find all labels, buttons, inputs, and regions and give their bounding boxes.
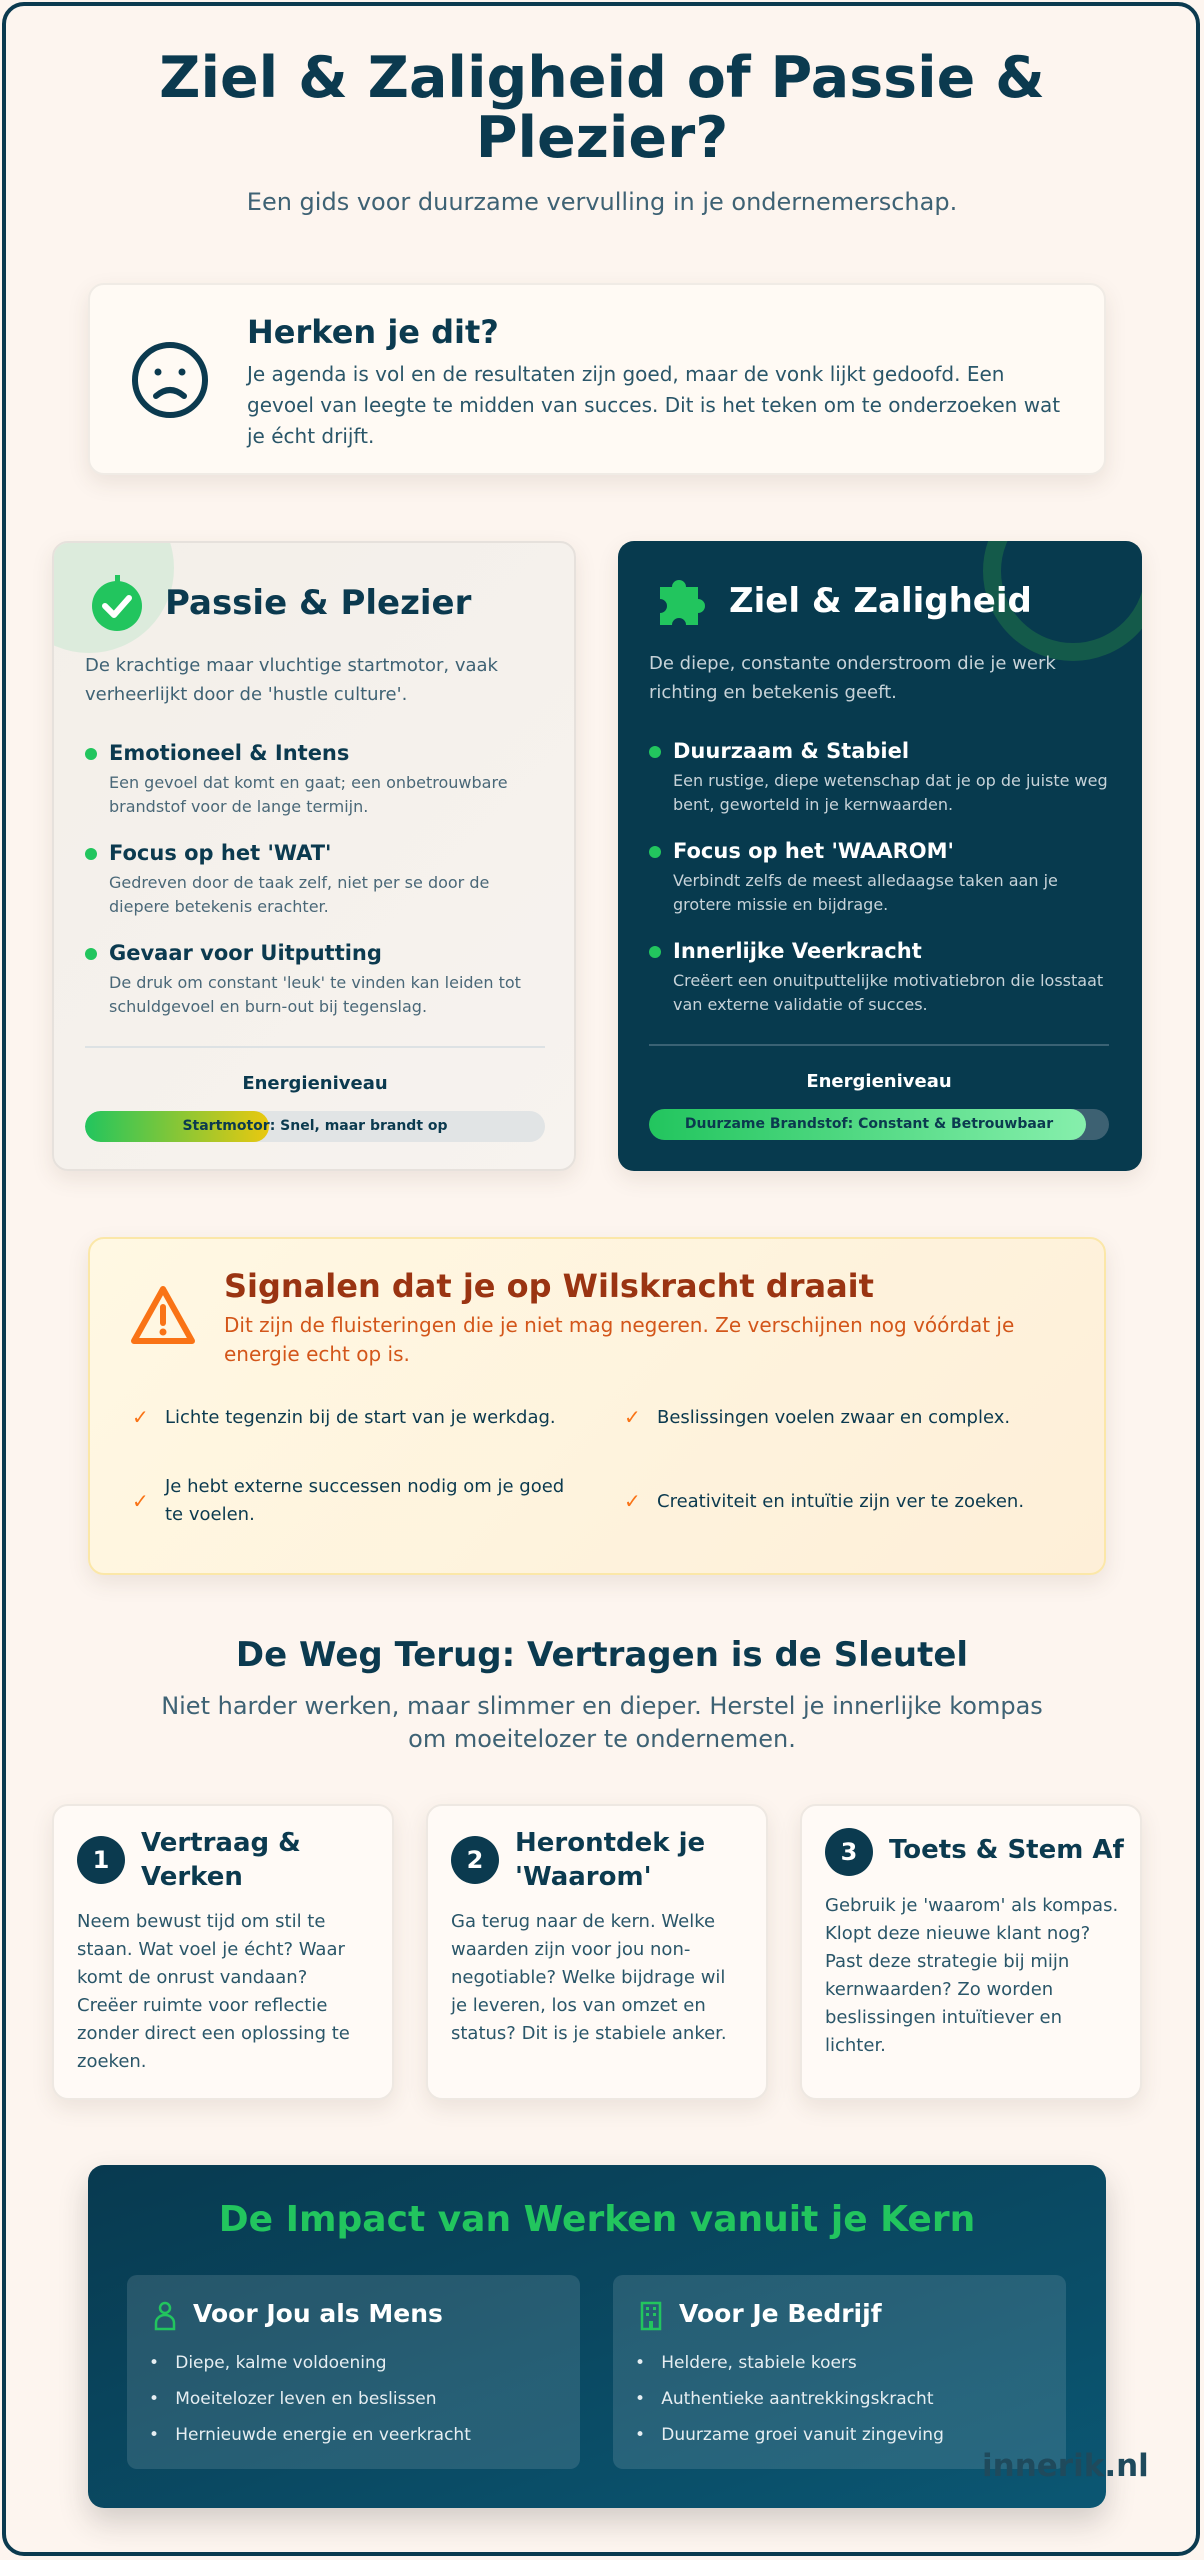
signal 1: Lichte tegenzin bij de start van je werkdag. [165,1407,556,1428]
subpanel: voor jou: • Diepe, kalme voldoening [149,2353,387,2373]
signal 4: ✓ [624,1489,641,1513]
subpanel: voor bedrijf: • Authentieke aantrekkingskracht [635,2389,934,2409]
icon: sad face [132,342,208,418]
energy bar: Duurzame Brandstof: Constant & Betrouwbaar [685,1116,1053,1132]
energy bar: Startmotor: Snel, maar brandt op [182,1118,448,1134]
bullet 2: Gedreven door de taak zelf, niet per se door de diepere betekenis erachter. [109,873,489,916]
signal 2: Beslissingen voelen zwaar en complex. [657,1407,1010,1428]
step 2 [426,1804,768,2100]
bullet 3: Gevaar voor Uitputting [109,941,382,965]
number 1 [77,1836,125,1884]
bullet 2: Verbindt zelfs de meest alledaagse taken aan je grotere missie en bijdrage. [673,871,1058,914]
heading: Ziel & Zaligheid [729,581,1032,621]
signal 3: ✓ [132,1489,149,1513]
bullet 2 [649,839,1058,914]
energy bar: Energieniveau [806,1071,952,1092]
step heading [515,1828,705,1892]
heading: Signalen dat je op Wilskracht draait [224,1267,874,1305]
bullet 3: De druk om constant 'leuk' te vinden kan leiden tot schuldgevoel en burn-out bij tegenslag. [109,973,521,1016]
subpanel: voor jou: • Moeitelozer leven en beslissen [149,2389,437,2409]
energy bar [85,1073,545,1142]
step text: Neem bewust tijd om stil te staan. Wat voel je écht? Waar komt de onrust vandaan? Creëer ruimte voor reflectie zonder direct een oplossing te zoeken. [77,1911,350,2072]
bullet 3 [85,941,521,1016]
bullet 2: Focus op het 'WAAROM' [673,839,954,863]
bullet 1 [649,739,1108,814]
icon: person [154,2302,176,2330]
icon: warning [131,1286,195,1344]
heading: Passie & Plezier [165,583,471,623]
energy bar: Energieniveau [242,1073,388,1094]
description: De diepe, constante onderstroom die je werk richting en betekenis geeft. [649,653,1056,703]
subtitle: de weg terug: Niet harder werken, maar slimmer en dieper. Herstel je innerlijke kompas om moeitelozer te ondernemen. [161,1692,1043,1753]
bullet 2 [85,841,489,916]
subpanel: voor bedrijf: Voor Je Bedrijf [679,2299,882,2328]
step 3 [800,1804,1142,2100]
title: Ziel & Zaligheid of Passie & [159,45,1045,111]
description: De krachtige maar vluchtige startmotor, vaak verheerlijkt door de 'hustle culture'. [85,655,498,705]
subpanel: voor bedrijf [613,2275,1066,2469]
number 3: 3 [841,1838,857,1866]
step 1 [52,1804,394,2100]
bullet 1 [85,741,508,816]
signal 3: Je hebt externe successen nodig om je goed te voelen. [165,1476,564,1525]
step heading: 'Waarom' [515,1862,652,1892]
bullet 1: Duurzaam & Stabiel [673,739,909,763]
bullet 3: Innerlijke Veerkracht [673,939,922,963]
heading: de weg terug: De Weg Terug: Vertragen is de Sleutel [236,1635,968,1675]
step text: Ga terug naar de kern. Welke waarden zijn voor jou non-negotiable? Welke bijdrage wil je leveren, los van omzet en status? Dit is je stabiele anker. [451,1911,727,2044]
icon: building [640,2302,662,2330]
panel: ziel & zaligheid [618,541,1142,1171]
signal 4: Creativiteit en intuïtie zijn ver te zoeken. [657,1491,1024,1512]
brand: innerik.nl [982,2448,1149,2484]
title: Plezier? [476,105,728,171]
impact title: De Impact van Werken vanuit je Kern [219,2199,975,2240]
number 2 [451,1836,499,1884]
panel: impact [88,2165,1106,2508]
panel: herken je dit [88,283,1106,475]
bullet 1: Een rustige, diepe wetenschap dat je op de juiste weg bent, geworteld in je kernwaarden. [673,771,1108,814]
icon: check [92,575,142,631]
signal 2: ✓ [624,1405,641,1429]
step heading: Toets & Stem Af [889,1835,1124,1865]
subtext: Dit zijn de fluisteringen die je niet mag negeren. Ze verschijnen nog vóórdat je energie echt op is. [224,1313,1014,1366]
panel: passie & plezier [52,541,576,1171]
number 2: 2 [467,1846,483,1874]
bullet 1: Een gevoel dat komt en gaat; een onbetrouwbare brandstof voor de lange termijn. [109,773,508,816]
icon: puzzle [660,580,705,625]
subpanel: voor jou: • Hernieuwde energie en veerkracht [149,2425,471,2445]
number 3 [825,1828,873,1876]
step heading: Herontdek je [515,1828,705,1858]
step text: Gebruik je 'waarom' als kompas. Klopt deze nieuwe klant nog? Past deze strategie bij mijn kernwaarden? Zo worden beslissingen intuïtiever en lichter. [825,1895,1118,2056]
bullet 3 [649,939,1103,1014]
subpanel: voor jou: Voor Jou als Mens [193,2299,443,2328]
heading: Herken je dit? [247,313,499,351]
step heading: Vertraag & [141,1828,301,1858]
subpanel: voor jou [127,2275,580,2469]
step heading: Verken [141,1862,243,1892]
energy bar [649,1071,1109,1140]
panel: signalen [88,1237,1106,1575]
step heading [141,1828,301,1892]
title [159,45,1045,171]
bullet 2: Focus op het 'WAT' [109,841,331,865]
signal 1: ✓ [132,1405,149,1429]
bullet 3: Creëert een onuitputtelijke motivatiebron die losstaat van externe validatie of succes. [673,971,1103,1014]
bullet 1: Emotioneel & Intens [109,741,349,765]
number 1: 1 [93,1846,109,1874]
subtitle: Een gids voor duurzame vervulling in je ondernemerschap. [247,188,957,216]
text: Je agenda is vol en de resultaten zijn goed, maar de vonk lijkt gedoofd. Een gevoel van leegte te midden van succes. Dit is het teken om te onderzoeken wat je écht drijft. [247,362,1060,448]
subpanel: voor bedrijf: • Heldere, stabiele koers [635,2353,857,2373]
subpanel: voor bedrijf: • Duurzame groei vanuit zingeving [635,2425,944,2445]
